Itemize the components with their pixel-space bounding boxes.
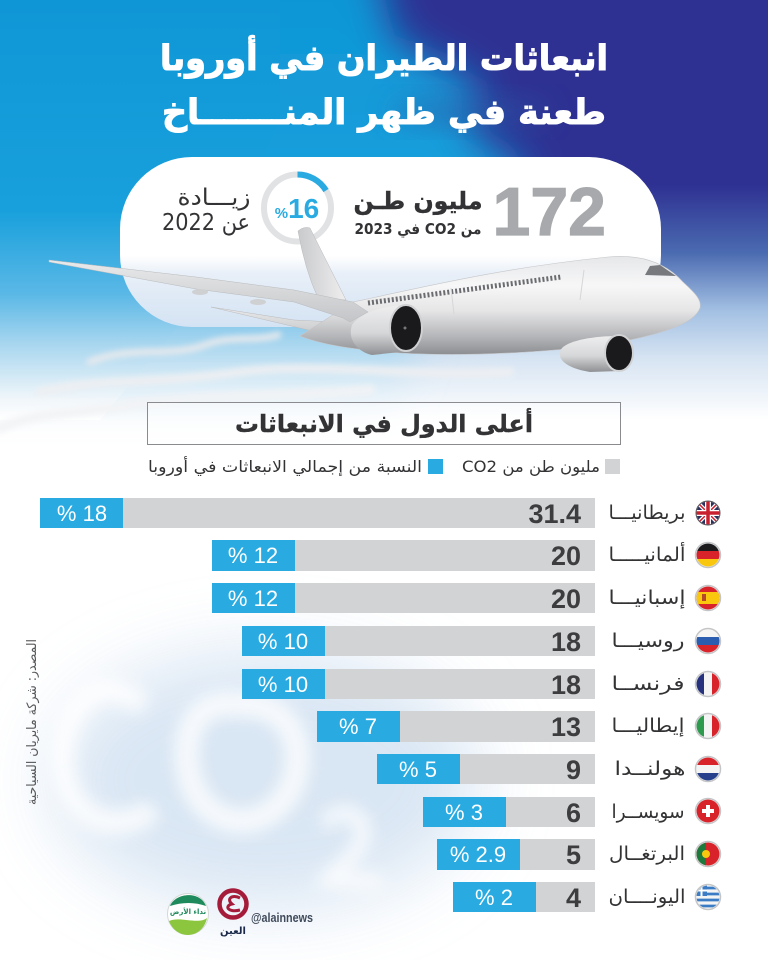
row: Greece: اليونــــان [608,886,686,908]
row: Switzerland: سويســرا [612,801,684,823]
panel: total emissions pill [120,157,661,327]
title [160,35,608,133]
section heading box: أعلى الدول في الانبعاثات [235,408,533,438]
row: Spain [212,583,720,614]
row: Russia [242,626,720,657]
row: Netherlands [377,754,720,785]
CO2 in 2023 label: من CO2 في 2023 [354,220,482,238]
legend [148,456,620,477]
title: انبعاثات الطيران في أوروبا [160,35,608,79]
bar chart: countries [40,498,720,913]
row: Russia: % 10 [258,629,308,654]
row: Netherlands: هولنــدا [614,758,686,780]
row: Russia: 18 [551,627,581,657]
CO2 cloud lettering [62,690,375,882]
row: Germany: 20 [551,541,581,571]
row: Italy: إيطاليـــا [612,715,684,738]
logo: Al Ain News: العين [220,926,246,937]
logo: Al Ain News: @alainnews [251,910,313,925]
row: Italy: 13 [551,712,581,742]
tail fin [298,227,346,300]
row: France [242,669,720,700]
row: UK [40,498,720,529]
row: Greece [453,882,720,913]
row: Spain: 20 [551,584,581,614]
contrails [0,335,510,428]
row: Portugal [437,839,720,870]
main wing [49,260,368,322]
source note: المصدر: شركة مايريان السياحية [25,639,40,805]
airplane [49,227,700,372]
row: UK: بريطانيـــا [608,502,686,524]
row: Italy [317,711,720,742]
increase label: عن 2022 [162,210,250,236]
logo: The Earth Call [168,894,208,935]
row: Portugal: 5 [566,840,581,870]
row: Portugal: % 2.9 [450,842,506,867]
row: France: فرنســا [612,673,684,695]
row: Germany [212,540,720,571]
row: Greece: 4 [566,883,581,913]
row: Spain: % 12 [228,586,278,611]
far wing and stabilizer [211,307,345,338]
section heading box [148,402,620,444]
progress ring 16 percent [264,174,331,242]
increase label [162,185,250,236]
row: Spain: إسبانيـــا [608,587,686,610]
row: Russia: روسيـــا [612,630,684,652]
logo: The Earth Call: نداء الأرض [170,907,206,916]
row: France: % 10 [258,672,308,697]
cockpit window [645,265,676,276]
row: Switzerland: 6 [566,798,581,828]
big number 172: 172 [493,174,606,250]
row: Germany: ألمانيـــــا [608,542,686,566]
row: Greece: % 2 [475,885,513,910]
fuselage [300,256,700,354]
row: Germany: % 12 [228,543,278,568]
increase label: زيـــادة [178,185,250,211]
progress ring 16 percent: %16 [275,193,319,224]
row: Netherlands: % 5 [399,757,437,782]
engine near [351,305,422,355]
row: UK: 31.4 [528,499,581,529]
legend: النسبة من إجمالي الانبعاثات في أوروبا [148,456,422,477]
cabin windows [368,277,561,303]
legend: مليون طن من CO2 [462,457,600,477]
row: France: 18 [551,670,581,700]
logo: Al Ain News [220,890,313,937]
title: طعنة في ظهر المنـــــــاخ [162,93,606,133]
row: Switzerland: % 3 [445,800,483,825]
row: Switzerland [423,797,720,828]
row: UK: % 18 [57,501,107,526]
million tons label: مليون طـن [354,187,482,215]
engine far [560,335,633,372]
row: Portugal: البرتغــال [609,843,685,865]
row: Italy: % 7 [339,714,377,739]
row: Netherlands: 9 [566,755,581,785]
